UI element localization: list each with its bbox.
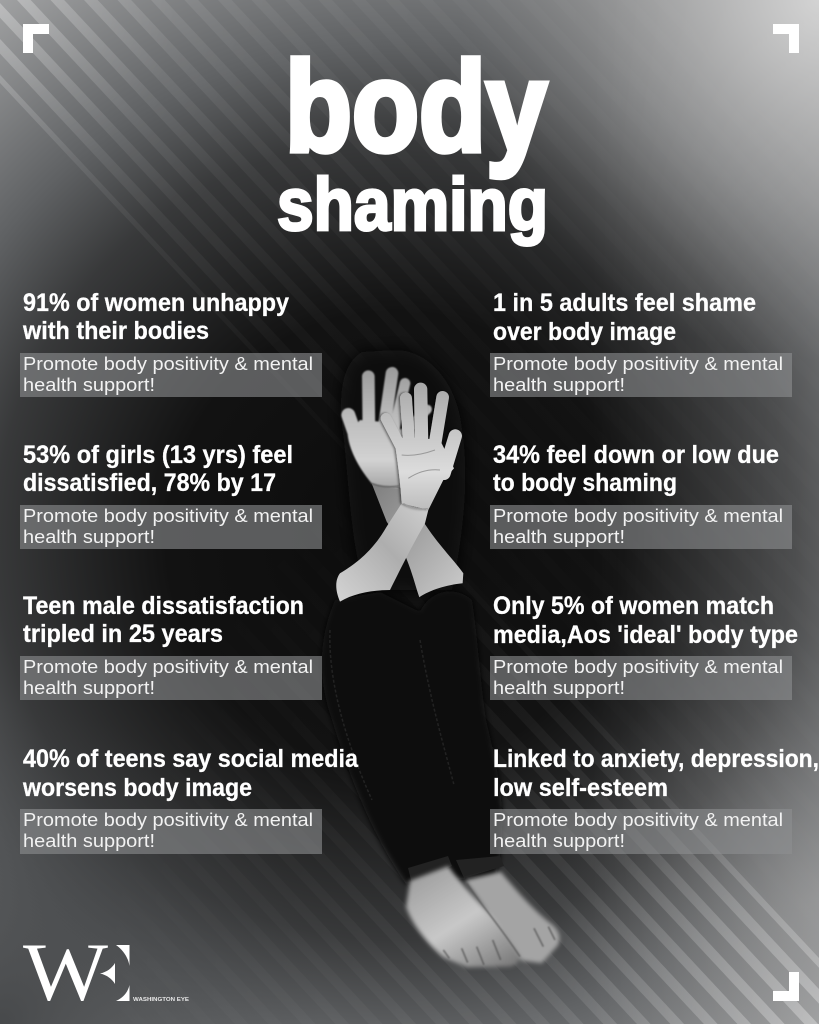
stat: 34% feel down: health support!: [493, 526, 625, 547]
stat: 40% of teens: worsens body image: [22, 774, 252, 802]
stat: 1 in 5 adults: 1 in 5 adults feel shame: [493, 289, 756, 317]
stat: 91% of women: health support!: [23, 374, 155, 395]
title: body: [285, 36, 547, 179]
stat: 1 in 5 adults: health support!: [493, 374, 625, 395]
logo: Washington Eye: [23, 926, 189, 1018]
stat: 34% feel down: Promote body positivity & mental: [493, 505, 783, 526]
title: shaming: [277, 163, 548, 246]
stat: 91% of women: Promote body positivity & mental: [23, 353, 313, 374]
stat: 91% of women: [20, 289, 322, 397]
logo: Washington Eye: W: [23, 926, 109, 1018]
logo: Washington Eye: WASHINGTON EYE: [133, 997, 189, 1003]
stat: 1 in 5 adults: over body image: [493, 318, 676, 346]
stat: 53% of girls: Promote body positivity & mental: [23, 505, 313, 526]
stat: linked to anxiety: Promote body positivity & mental: [493, 809, 783, 830]
stat: only 5% of women: Only 5% of women match: [493, 592, 774, 620]
stat: 53% of girls: [20, 441, 322, 549]
stat: 34% feel down: 34% feel down or low due: [493, 441, 779, 469]
stat: linked to anxiety: health support!: [493, 830, 625, 851]
stat: 34% feel down: [490, 441, 792, 549]
corner bracket top left: [23, 24, 49, 53]
title: [277, 36, 548, 246]
stat: 91% of women: with their bodies: [22, 317, 209, 345]
legs in dark jeans: [322, 591, 504, 884]
stat: teen male: health support!: [23, 677, 155, 698]
stat: only 5% of women: health support!: [493, 677, 625, 698]
stat: 1 in 5 adults: [490, 289, 792, 397]
stat: teen male: Teen male dissatisfaction: [23, 592, 304, 620]
stat: 91% of women: 91% of women unhappy: [23, 289, 289, 317]
stat: 40% of teens: 40% of teens say social media: [23, 745, 359, 773]
stat: linked to anxiety: low self-esteem: [493, 774, 668, 802]
corner bracket top right: [773, 24, 799, 53]
stat: 40% of teens: [20, 745, 359, 854]
stat: linked to anxiety: [490, 745, 819, 854]
corner bracket bottom right: [773, 972, 799, 1001]
stat: 53% of girls: health support!: [23, 526, 155, 547]
front arm: [336, 503, 428, 602]
hair: [341, 350, 465, 590]
stat: only 5% of women: Promote body positivity & mental: [493, 656, 783, 677]
feet: [406, 866, 560, 967]
photo: seated person covering face with crossed hands: [322, 350, 560, 967]
back hand: [348, 373, 427, 488]
back arm: [372, 483, 463, 597]
stat: teen male: tripled in 25 years: [23, 620, 223, 648]
stat: 53% of girls: dissatisfied, 78% by 17: [23, 469, 276, 497]
stat: only 5% of women: [490, 592, 798, 700]
stat: 1 in 5 adults: Promote body positivity & mental: [493, 353, 783, 374]
stat: 40% of teens: Promote body positivity & mental: [23, 809, 313, 830]
stat: teen male: [20, 592, 322, 700]
stat: only 5% of women: media,Aos 'ideal' body type: [493, 621, 798, 649]
stat: 34% feel down: to body shaming: [493, 469, 677, 497]
front hand: [386, 389, 455, 510]
stat: 40% of teens: health support!: [23, 830, 155, 851]
stat: 53% of girls: 53% of girls (13 yrs) feel: [23, 441, 293, 469]
stat: teen male: Promote body positivity & mental: [23, 656, 313, 677]
